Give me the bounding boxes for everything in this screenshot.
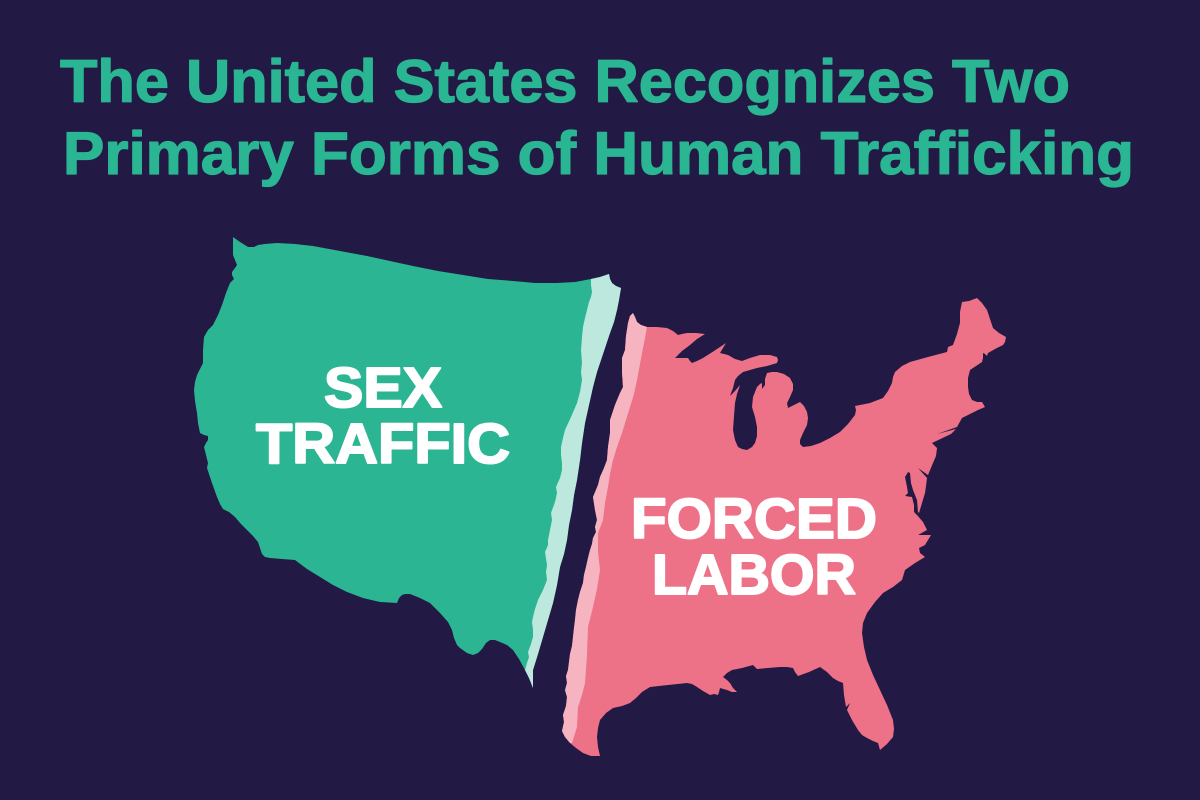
label: forced labor: LABOR bbox=[652, 543, 856, 607]
label: forced labor bbox=[631, 487, 877, 607]
label: sex traffic: TRAFFIC bbox=[256, 412, 510, 476]
title bbox=[60, 48, 1134, 187]
western map silhouette bbox=[194, 237, 621, 688]
torn paper strip, light pink bbox=[562, 313, 647, 743]
eastern map silhouette bbox=[562, 298, 1006, 756]
panel: sex traffic western map piece bbox=[194, 237, 621, 688]
label: forced labor: FORCED bbox=[631, 487, 877, 551]
label: sex traffic bbox=[256, 356, 510, 476]
label: sex traffic: SEX bbox=[324, 356, 442, 420]
title: The United States Recognizes Two bbox=[60, 48, 1070, 115]
panel: forced labor eastern map piece bbox=[562, 298, 1006, 756]
title: Primary Forms of Human Trafficking bbox=[63, 120, 1134, 187]
torn paper strip, light green bbox=[525, 274, 621, 688]
